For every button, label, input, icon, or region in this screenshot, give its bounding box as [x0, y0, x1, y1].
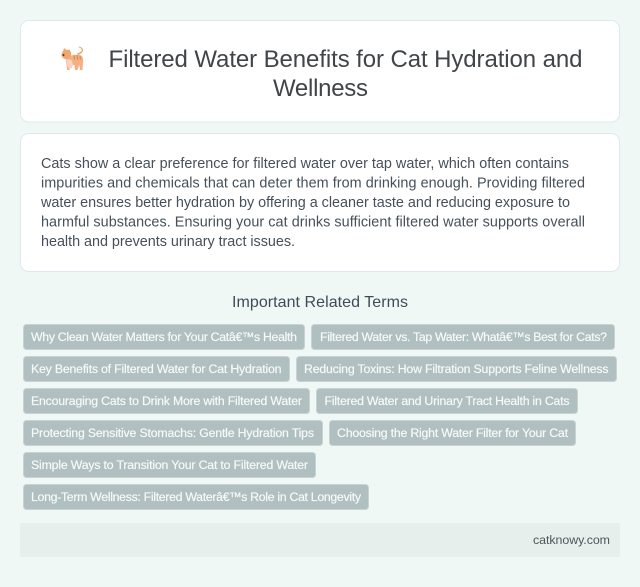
text block: description: water ensures better hydration by offering a cleaner taste and reducing exposure to — [40, 195, 570, 211]
text block: description: health and prevents urinary tract issues. — [41, 234, 295, 250]
text block: description: impurities and chemicals that can deter them from drinking enough. Providing filtered — [41, 176, 585, 192]
panel: header — [20, 20, 620, 122]
tag — [24, 484, 368, 510]
tag — [24, 452, 316, 478]
tag: Key Benefits of Filtered Water for Cat Hydration — [31, 362, 282, 376]
tag: Filtered Water and Urinary Tract Health in Cats — [324, 394, 570, 408]
tag list — [24, 324, 616, 510]
tag: Long-Term Wellness: Filtered Waterâ€™s Role in Cat Longevity — [31, 490, 362, 504]
text block: description: Cats show a clear preference for filtered water over tap water, which often contains — [41, 156, 569, 172]
footer text: site name: catknowy.com — [533, 533, 610, 547]
tag — [316, 388, 578, 414]
tag — [24, 388, 310, 414]
tag — [330, 420, 576, 446]
title: Filtered Water Benefits for Cat Hydration and — [108, 46, 582, 73]
title: Wellness — [273, 75, 368, 102]
text block: description — [40, 156, 585, 250]
icon: orange cat — [61, 46, 83, 70]
tag — [24, 356, 290, 382]
tag: Protecting Sensitive Stomachs: Gentle Hydration Tips — [31, 426, 314, 440]
tag: Filtered Water vs. Tap Water: Whatâ€™s Best for Cats? — [320, 330, 607, 344]
tag: Reducing Toxins: How Filtration Supports Feline Wellness — [304, 362, 608, 376]
text block: description: harmful substances. Ensuring your cat drinks sufficient filtered water supports overall — [41, 214, 585, 230]
tag — [312, 324, 614, 350]
tag: Why Clean Water Matters for Your Catâ€™s Health — [31, 330, 297, 344]
tag — [296, 356, 616, 382]
tag — [24, 324, 304, 350]
tag: Encouraging Cats to Drink More with Filtered Water — [31, 394, 302, 408]
panel: description — [20, 134, 620, 272]
tag: Choosing the Right Water Filter for Your Cat — [337, 426, 569, 440]
heading: related terms: Important Related Terms — [232, 294, 408, 311]
title — [108, 46, 582, 102]
footer — [20, 523, 620, 557]
tag: Simple Ways to Transition Your Cat to Filtered Water — [31, 458, 308, 472]
tag — [24, 420, 322, 446]
